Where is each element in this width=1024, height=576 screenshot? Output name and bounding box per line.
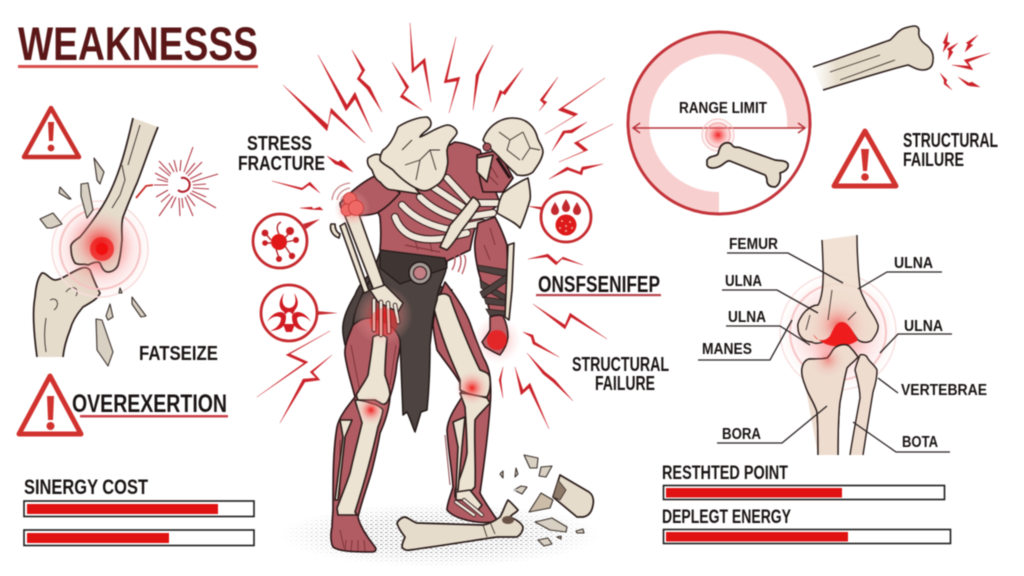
elbow glow: [334, 190, 370, 226]
tibia: [802, 345, 858, 455]
panel: fractured bone: [34, 118, 218, 366]
femur: [433, 294, 490, 397]
right shoulder plate: [497, 178, 530, 228]
panel: range limit dial: [628, 32, 810, 214]
label: stress fracture: [238, 133, 325, 175]
icon: pain starburst: [136, 147, 218, 216]
label: ulna upper right: ULNA: [894, 255, 933, 272]
label: femur: FEMUR: [729, 236, 778, 253]
bar: resthted point: [664, 486, 944, 500]
bar 1: [24, 501, 254, 516]
icon: broken bone piece: [529, 475, 593, 517]
arrow: range span: [633, 123, 805, 133]
arm bandage: [477, 265, 508, 316]
label: structural failure right: FAILURE: [903, 150, 964, 171]
label: bota: [853, 422, 950, 452]
left shoulder plate: [367, 117, 457, 194]
label: femur: [727, 236, 843, 283]
label: ulna middle left: [726, 309, 810, 345]
bone fragments: [40, 158, 146, 366]
ribcage: [395, 178, 497, 250]
right hand with glow: [473, 315, 521, 364]
label: stress fracture: STRESS: [247, 133, 312, 155]
fibula: [850, 355, 877, 455]
tibia and fibula: [337, 400, 383, 515]
label: structural failure centre: FAILURE: [595, 373, 655, 395]
label: bora: BORA: [722, 426, 761, 443]
right leg: [433, 282, 497, 523]
forearm bones: [345, 209, 384, 291]
icon: upper broken bone: [71, 118, 158, 272]
label: stress fracture: FRACTURE: [238, 153, 325, 175]
icon: warning triangle upper right: [834, 131, 896, 186]
icon: biohazard circle: [261, 285, 338, 341]
belt buckle: [380, 250, 447, 284]
sparks by upper right bone: [940, 32, 990, 90]
icon: broken femur on ground: [397, 500, 523, 550]
label: structural failure right: [903, 130, 998, 171]
title: WEAKNESSS: [18, 17, 258, 70]
icon: pain point: [701, 118, 735, 152]
vibration arcs: [452, 250, 466, 274]
label: structural failure centre: STRUCTURAL: [572, 354, 669, 376]
icon: small bone: [707, 143, 788, 187]
label: deplegt energy: DEPLEGT ENERGY: [662, 507, 791, 528]
label: ulna lower right: ULNA: [904, 318, 943, 335]
label: resthted point: RESTHTED POINT: [662, 463, 788, 484]
panel: sinergy cost bars: [24, 476, 254, 546]
left arm: [330, 175, 400, 293]
hand with glow: [353, 285, 413, 345]
label: fatseize: FATSEIZE: [139, 343, 218, 365]
label: ulna upper left: [722, 273, 818, 313]
label: ulna upper right: [858, 255, 942, 289]
label: ulna lower right: [880, 318, 952, 353]
panel: knee anatomy diagram: [698, 235, 987, 455]
icon: knee glow: [780, 274, 896, 390]
knee glow: [455, 371, 489, 405]
knee glow: [356, 395, 386, 425]
head: [477, 118, 543, 192]
icon: virus circle: [253, 214, 320, 268]
bar 2: [24, 530, 254, 546]
label: vertebrae: [878, 378, 987, 399]
label: onsfsenifep: ONSFSENIFEP: [538, 271, 660, 297]
feet bones: [456, 500, 482, 515]
label: sinergy cost: SINERGY COST: [24, 476, 148, 499]
anatomy labels: [698, 236, 987, 452]
femur: [356, 335, 390, 404]
tibia and fibula: [455, 393, 490, 497]
label: bota: BOTA: [902, 434, 938, 451]
left leg: [331, 305, 403, 552]
icon: upper right bone: [813, 26, 933, 90]
icon: warning triangle top left: [24, 108, 79, 157]
back of loincloth: [343, 268, 452, 345]
label: range limit: RANGE LIMIT: [679, 100, 767, 117]
femur: [798, 235, 878, 343]
label: bora: [717, 406, 827, 443]
icon: blood drops circle: [527, 192, 591, 242]
panel: resthted point and deplegt energy bars: [662, 463, 950, 544]
label: ulna middle left: ULNA: [728, 309, 766, 326]
ground stipple: [296, 508, 587, 565]
label: manes: MANES: [702, 341, 752, 358]
icon: pain glow rings: [50, 199, 150, 299]
label: structural failure centre: [572, 354, 669, 395]
figure: injured skeletal man: [330, 117, 543, 552]
icon: warning triangle lower left: [19, 376, 81, 434]
label: vertebrae: VERTEBRAE: [901, 382, 987, 399]
torso: [370, 142, 500, 262]
label: manes: [698, 320, 792, 360]
label: ulna upper left: ULNA: [725, 273, 762, 290]
lightning bolts around head: [257, 23, 613, 429]
loincloth front: [353, 252, 447, 432]
right arm: [475, 217, 514, 320]
icon: lower bone stump: [34, 268, 100, 357]
bar: deplegt energy: [664, 530, 950, 544]
bone shards: [500, 455, 584, 546]
heading: overexertion: OVEREXERTION: [72, 390, 227, 418]
